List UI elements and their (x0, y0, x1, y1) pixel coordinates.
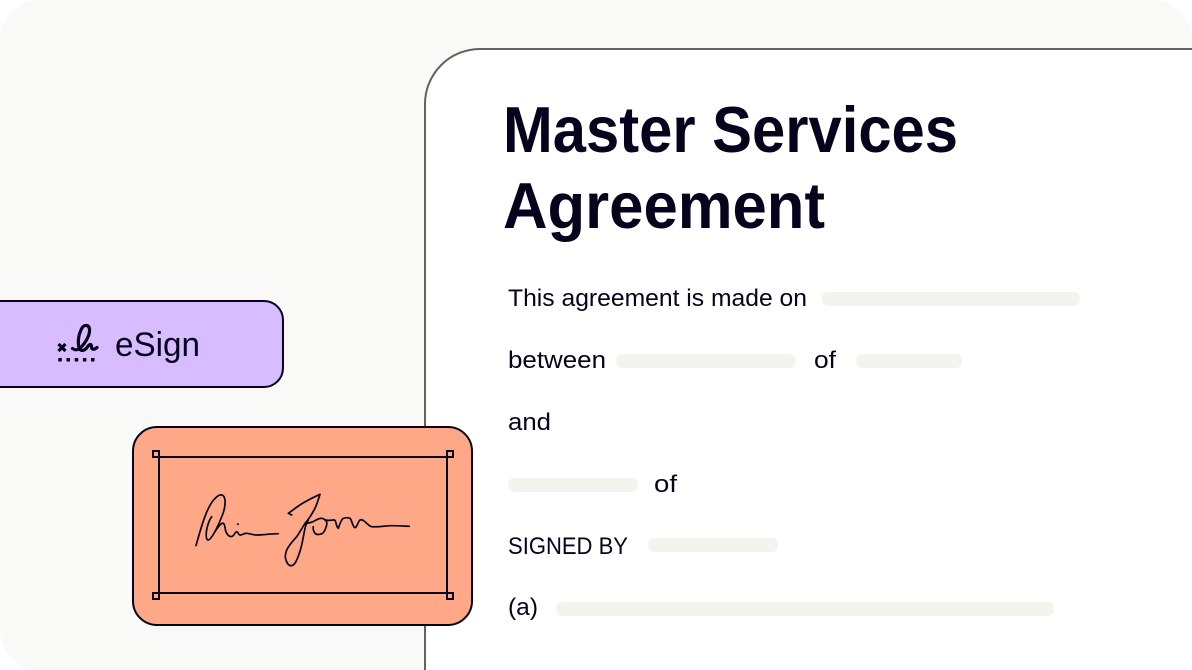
form line: second party (508, 471, 677, 498)
form line: clause a (508, 594, 1054, 621)
button label: eSign (115, 326, 200, 364)
form line: signed by (508, 533, 778, 560)
icon: signature mark (58, 325, 97, 362)
form line: clause a: (a) (508, 594, 538, 621)
title (503, 93, 958, 242)
form line: agreement date (508, 285, 1080, 312)
form line: between (508, 347, 962, 374)
handwritten signature (196, 494, 409, 566)
title: Agreement (503, 169, 825, 242)
selection frame (153, 451, 453, 599)
form line: between: between (508, 347, 606, 374)
form line: agreement date: This agreement is made on (508, 285, 807, 312)
form line: second party: of (654, 471, 677, 498)
eSign button (0, 301, 283, 387)
form line: between: of (814, 347, 836, 374)
title: Master Services (503, 93, 958, 166)
signature card (133, 427, 472, 625)
agreement form lines (508, 285, 1080, 621)
form line: signed by: SIGNED BY (508, 533, 628, 560)
form line: and: and (508, 409, 551, 436)
panel: document page (425, 49, 1192, 670)
